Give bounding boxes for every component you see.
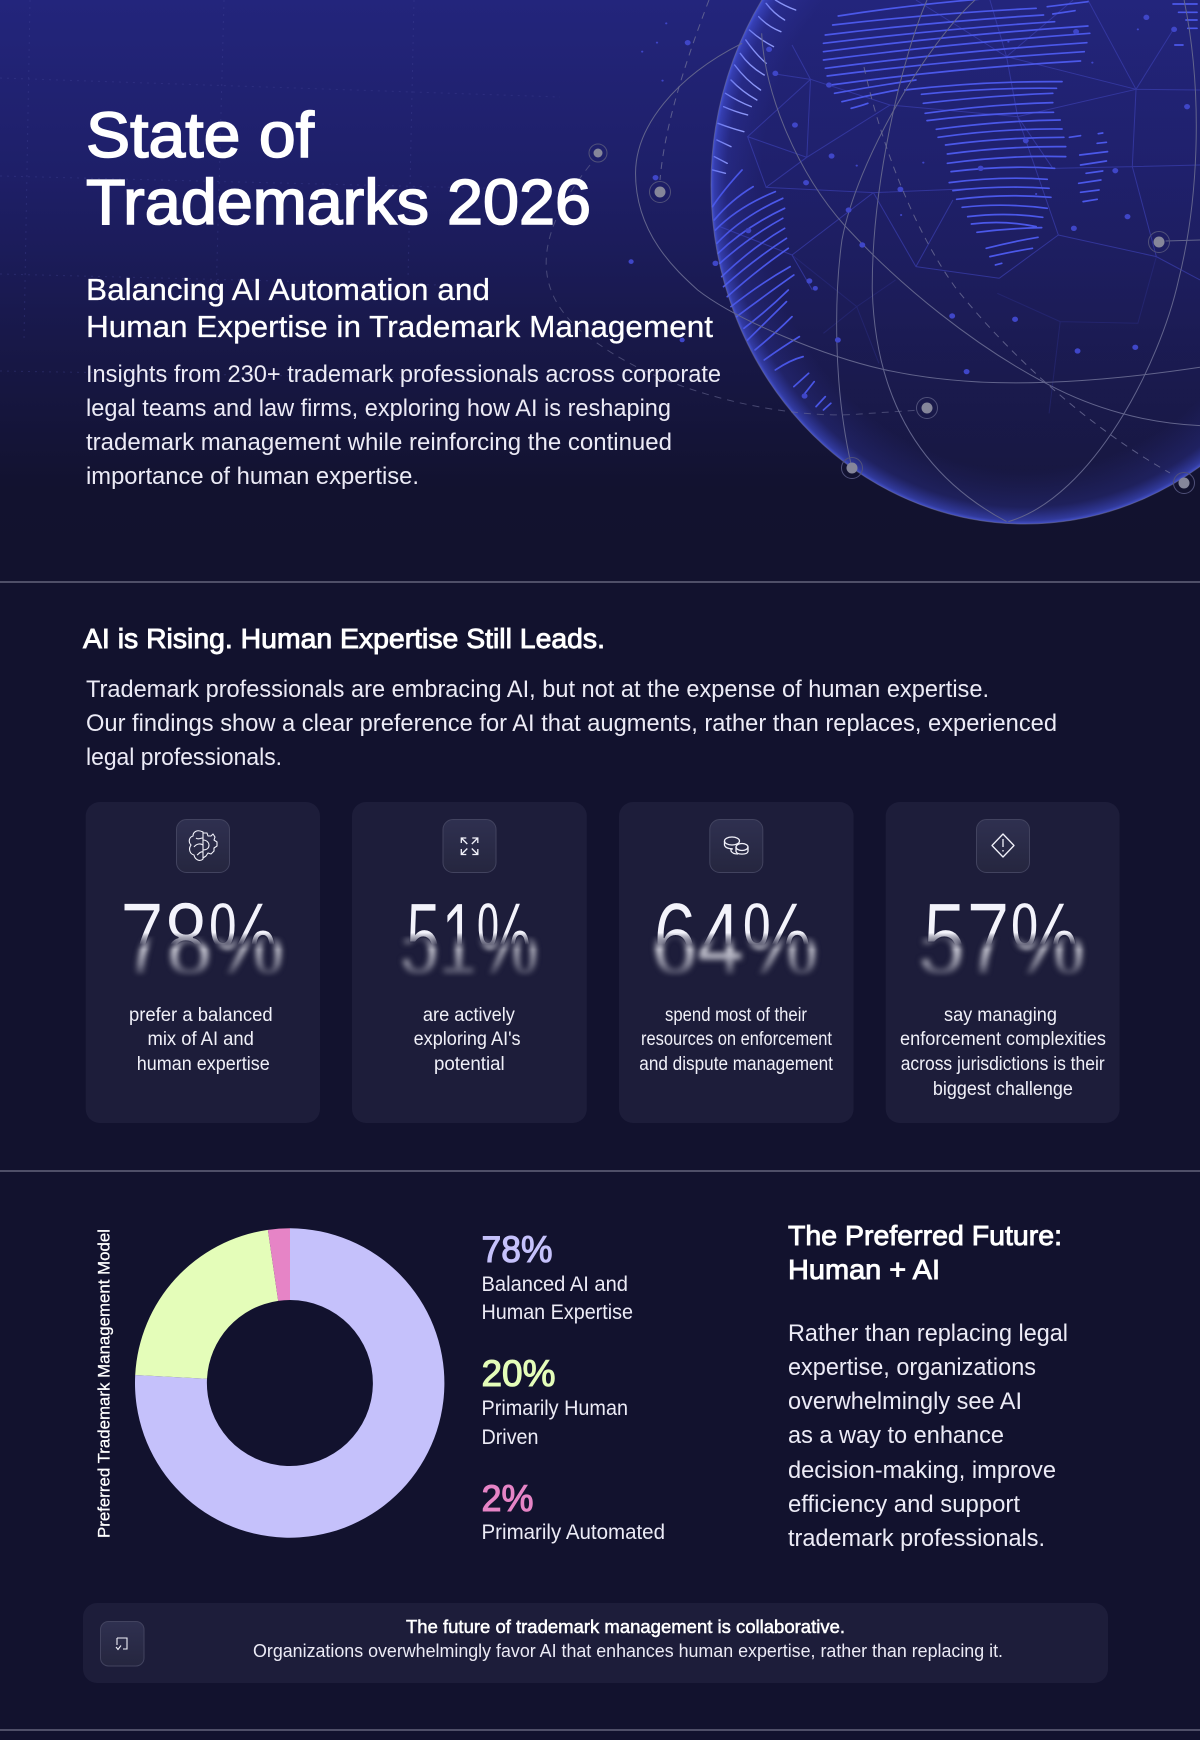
preferred future paragraph: as a way to enhance [788, 1422, 1004, 1449]
rotated chart label: Preferred Trademark Management Model [96, 1229, 114, 1538]
stat description: spend most of their [665, 1005, 808, 1026]
legend: 78% balanced: Human Expertise [482, 1301, 633, 1324]
network web [720, 0, 1200, 290]
heading: preferred future: Human + AI [788, 1254, 940, 1285]
preferred future paragraph: decision-making, improve [788, 1457, 1056, 1484]
callout text: Organizations overwhelmingly favor AI that enhances human expertise, rather than replacing it. [253, 1640, 1003, 1661]
globe rim glow [711, 0, 1200, 524]
stat description: enforcement complexities [900, 1029, 1106, 1050]
legend: 20% human driven: Driven [482, 1426, 538, 1449]
lower faint web [792, 255, 1156, 413]
big number 78% [124, 902, 286, 976]
legend: 2% automated: 2% [482, 1478, 534, 1519]
big number 51%: 51% [406, 882, 532, 998]
big number 64% [651, 903, 820, 976]
stat description: biggest challenge [933, 1079, 1073, 1100]
stat description: say managing [944, 1005, 1057, 1026]
legend: 78% balanced: Balanced AI and [482, 1273, 628, 1296]
globe illustration [546, 0, 1200, 524]
intro text: importance of human expertise. [86, 463, 419, 490]
heading: preferred future [788, 1220, 1062, 1285]
legend: 20% human driven: Primarily Human [482, 1397, 628, 1420]
section paragraph: Trademark professionals are embracing AI, but not at the expense of human expertise. [86, 676, 989, 703]
preferred future paragraph: Rather than replacing legal [788, 1320, 1068, 1347]
title: Trademarks 2026 [86, 166, 591, 238]
big number 78%: 78% [120, 882, 278, 998]
globe outline [711, 0, 1200, 524]
preferred future paragraph: expertise, organizations [788, 1354, 1036, 1381]
stat description: prefer a balanced [129, 1005, 273, 1026]
orbit lines [636, 0, 1200, 522]
legend: 20% human driven [482, 1353, 628, 1449]
title [86, 99, 591, 238]
stat description [900, 1005, 1106, 1100]
preferred future paragraph: efficiency and support [788, 1491, 1020, 1518]
globe rim stripes [712, 0, 796, 173]
star dots [629, 15, 1190, 399]
stat description: exploring AI's [414, 1029, 521, 1050]
stat description [129, 1005, 273, 1075]
title: State of [86, 99, 314, 171]
big number 57%: 57% [923, 882, 1079, 998]
preferred future paragraph: overwhelmingly see AI [788, 1388, 1022, 1415]
stat description [639, 1005, 834, 1075]
icon: document check [100, 1622, 144, 1666]
stat description: are actively [423, 1005, 515, 1026]
section paragraph: legal professionals. [86, 744, 282, 771]
big number 78%: 78% [122, 883, 284, 999]
heading: preferred future: The Preferred Future: [788, 1220, 1062, 1251]
hero background [0, 0, 1200, 582]
stat description: and dispute management [639, 1054, 834, 1075]
legend: 78% balanced: 78% [482, 1229, 552, 1270]
section paragraph: Our findings show a clear preference for AI that augments, rather than replaces, experienced [86, 710, 1057, 737]
preferred future paragraph: trademark professionals. [788, 1525, 1045, 1552]
icon: brain and gear [176, 820, 230, 872]
big number 51%: 51% [400, 883, 538, 999]
stat description: potential [434, 1054, 505, 1075]
panel: stat card 78% [86, 802, 320, 1123]
stat description: mix of AI and [148, 1029, 254, 1050]
continent hatch lines [712, 0, 1197, 410]
subtitle: Human Expertise in Trademark Management [86, 309, 713, 344]
intro text: Insights from 230+ trademark professionals across corporate [86, 361, 721, 388]
callout text: The future of trademark management is collaborative. [406, 1616, 845, 1637]
intro text: legal teams and law firms, exploring how AI is reshaping [86, 395, 671, 422]
icon: expand arrows [443, 820, 496, 872]
big number 64%: 64% [651, 883, 818, 999]
legend: 78% balanced [482, 1229, 633, 1324]
callout text [253, 1616, 1003, 1661]
stat description: across jurisdictions is their [901, 1054, 1105, 1075]
donut chart [135, 1228, 444, 1538]
panel: stat card 57% [886, 802, 1120, 1123]
callout [83, 1603, 1108, 1683]
subtitle: Balancing AI Automation and [86, 272, 490, 307]
section heading: AI is rising: AI is Rising. Human Expertise Still Leads. [83, 623, 605, 654]
icon: coins [710, 820, 763, 872]
subtitle [86, 272, 713, 344]
background dotted grid [0, 0, 560, 378]
globe connection nodes [589, 144, 1194, 494]
section paragraph [86, 676, 1057, 771]
big number 64%: 64% [653, 882, 812, 998]
legend: 20% human driven: 20% [482, 1353, 556, 1394]
big number 57%: 57% [918, 883, 1085, 999]
big number 51% [400, 903, 540, 976]
panel: stat card 51% [352, 802, 587, 1123]
stat description: resources on enforcement [641, 1029, 833, 1050]
stat description: human expertise [137, 1054, 270, 1075]
panel: stat card 64% [619, 802, 854, 1123]
legend: 2% automated [482, 1478, 665, 1544]
big number 57% [918, 903, 1086, 976]
stat description [414, 1005, 521, 1075]
intro text: trademark management while reinforcing the continued [86, 429, 672, 456]
globe body [711, 0, 1200, 524]
intro text [86, 361, 721, 490]
legend: 2% automated: Primarily Automated [482, 1521, 665, 1544]
icon: warning diamond [976, 820, 1030, 872]
dashed orbit paths [546, 0, 1170, 473]
preferred future paragraph [788, 1320, 1068, 1552]
